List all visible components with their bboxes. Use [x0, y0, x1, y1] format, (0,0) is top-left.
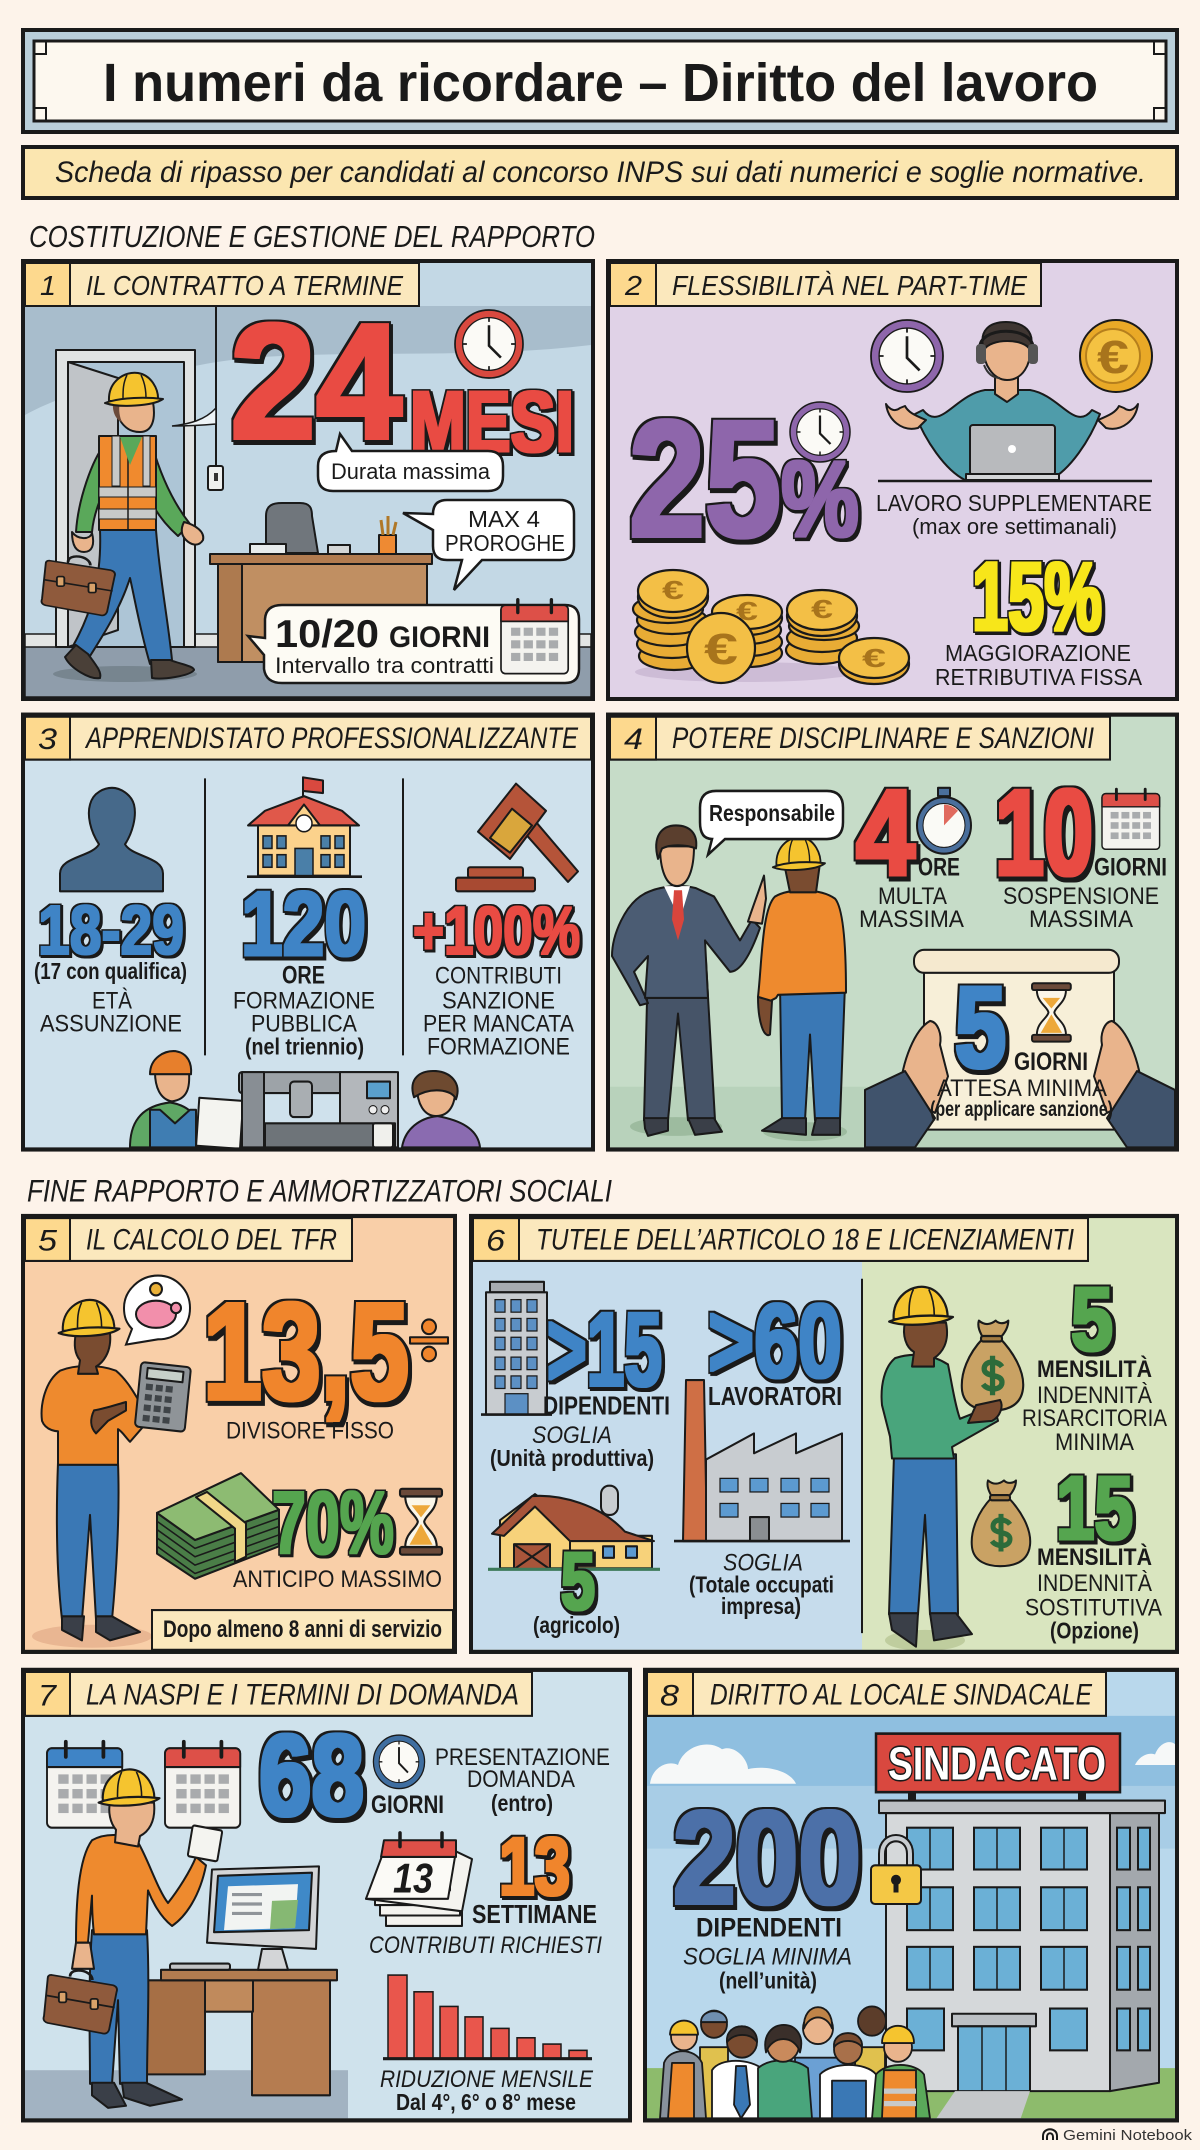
- number: 5 agricolo: [533, 1535, 620, 1638]
- column: ore: FORMAZIONE: [233, 987, 375, 1013]
- bubble: durata massima: Durata massima: [331, 459, 491, 484]
- panel tab: 6: [486, 1225, 505, 1258]
- column: contributi: CONTRIBUTI: [435, 962, 562, 988]
- number: 5 giorni: GIORNI: [1014, 1049, 1088, 1076]
- icon: purple clock: [871, 320, 943, 392]
- text: soglia totale: impresa): [721, 1594, 801, 1619]
- panel tab: 3: [38, 724, 57, 756]
- number: 25%: %: [781, 438, 859, 559]
- building: [879, 1792, 1165, 2120]
- panel tab: APPRENDISTATO PROFESSIONALIZZANTE: [84, 723, 579, 755]
- icon: coin stacks: €: [736, 596, 758, 626]
- number: 10 giorni: SOSPENSIONE: [1003, 882, 1159, 909]
- number: 25%: 25: [629, 387, 781, 572]
- bubble: durata massima: [318, 434, 503, 491]
- column: età: ETÀ: [92, 987, 132, 1013]
- text: soglia totale: (Totale occupati: [689, 1572, 834, 1597]
- number: 70%: 70%: [272, 1474, 394, 1573]
- panel tab: 8: [660, 1680, 679, 1713]
- column: contributi: +100%: [413, 894, 580, 969]
- number: 10 giorni: GIORNI: [1094, 854, 1167, 882]
- bubble: max 4 proroghe: MAX 4: [468, 506, 540, 532]
- column: età: [34, 788, 187, 1036]
- number: 5 mensilità: RISARCITORIA: [1022, 1405, 1167, 1431]
- number: 24: 24: [230, 290, 402, 473]
- icon: coin stacks: €: [662, 575, 684, 605]
- text: riduzione mensile: [380, 2065, 593, 2115]
- text: presentazione domanda: DOMANDA: [467, 1765, 575, 1792]
- wall line and switch: [208, 306, 223, 490]
- icon: red calendar: [165, 1742, 240, 1828]
- icon: coin stacks: €: [862, 643, 886, 673]
- text: maggiorazione: [935, 640, 1143, 690]
- number: 5 mensilità: MENSILITÀ: [1037, 1354, 1152, 1382]
- number: 5 giorni: (per applicare sanzione): [930, 1098, 1113, 1121]
- icon: money bag: [972, 1480, 1030, 1566]
- text: presentazione domanda: [435, 1744, 610, 1816]
- panel 2: part-time: [608, 261, 1177, 699]
- number: 200: 200: [673, 1784, 861, 1932]
- icon: division sign: [410, 1319, 448, 1361]
- number: 15 mensilità: SOSTITUTIVA: [1025, 1594, 1162, 1620]
- number: 13 settimane: [369, 1821, 602, 1958]
- number: 68 giorni: GIORNI: [371, 1792, 444, 1819]
- panel tab: [25, 717, 591, 760]
- number: 15%: 15%: [972, 542, 1102, 651]
- number: 68 giorni: 68: [259, 1711, 364, 1840]
- number: 15 mensilità: MENSILITÀ: [1037, 1543, 1152, 1570]
- number: 5 agricolo: (agricolo): [533, 1613, 620, 1638]
- panel tab: [25, 263, 419, 306]
- callout: 10/20 giorni: Intervallo tra contratti: [275, 653, 494, 678]
- number: 5 giorni: 5: [955, 963, 1006, 1091]
- panel tab: 5: [38, 1225, 57, 1258]
- text: anticipo massimo: ANTICIPO MASSIMO: [233, 1566, 442, 1592]
- title banner: I numeri da ricordare – Diritto del lavoro: [103, 53, 1098, 113]
- column: ore: PUBBLICA: [251, 1010, 357, 1036]
- number: 13,5: 13,5: [203, 1274, 409, 1429]
- text: riduzione mensile: RIDUZIONE MENSILE: [380, 2065, 593, 2092]
- subtitle strip: Scheda di ripasso per candidati al concorso INPS sui dati numerici e soglie normative.: [55, 156, 1146, 189]
- desk and computer: [130, 1866, 337, 2095]
- number: 15 mensilità: 15: [1056, 1457, 1133, 1558]
- icon: euro coin: [1080, 320, 1152, 392]
- section heading: costituzione: COSTITUZIONE E GESTIONE DEL RAPPORTO: [29, 219, 595, 254]
- apprentice, machine and tutor: [130, 1051, 480, 1149]
- panel tab: [473, 1218, 1088, 1261]
- note: dopo almeno 8 anni: Dopo almeno 8 anni di servizio: [163, 1616, 442, 1642]
- group of workers: [660, 2006, 930, 2118]
- number: >15 dipendenti: DIPENDENTI: [543, 1392, 670, 1421]
- number: 5 mensilità: MINIMA: [1055, 1429, 1134, 1455]
- callout: 10/20 giorni: GIORNI: [389, 621, 490, 654]
- icon: coin stacks: €: [704, 625, 738, 674]
- panel tab: [610, 263, 1041, 306]
- text: dipendenti soglia minima: DIPENDENTI: [696, 1912, 842, 1943]
- panel tab: FLESSIBILITÀ NEL PART-TIME: [672, 270, 1027, 301]
- worker with briefcase: [42, 373, 203, 679]
- text: maggiorazione: RETRIBUTIVA FISSA: [935, 664, 1143, 690]
- icon: calendar stack: 13: [393, 1855, 433, 1902]
- manager in suit: [612, 825, 766, 1136]
- section heading: fine rapporto: FINE RAPPORTO E AMMORTIZZATORI SOCIALI: [27, 1173, 612, 1209]
- number: 68 giorni: [259, 1711, 444, 1840]
- panel tab: [25, 1218, 352, 1261]
- panel tab: [610, 717, 1110, 760]
- panel 6: articolo 18: [471, 1216, 1177, 1652]
- panel tab: 4: [624, 724, 643, 756]
- number: >15 dipendenti: >15: [547, 1290, 662, 1408]
- bubble: responsabile: Responsabile: [709, 801, 835, 826]
- panel tab: IL CONTRATTO A TERMINE: [86, 270, 403, 301]
- panel tab: DIRITTO AL LOCALE SINDACALE: [710, 1679, 1093, 1712]
- icon: hourglass: [400, 1489, 442, 1555]
- text: soglia totale: [689, 1549, 834, 1619]
- icon: red clock: [455, 310, 523, 378]
- number: 10 giorni: [995, 766, 1167, 932]
- column: età: (17 con qualifica): [34, 959, 187, 984]
- clouds: [650, 1742, 1175, 1784]
- column: ore: [233, 777, 375, 1059]
- text: divisore fisso: DIVISORE FISSO: [226, 1417, 394, 1444]
- number: 4 ore: 4: [856, 766, 915, 901]
- number: 5 giorni: ATTESA MINIMA: [937, 1075, 1107, 1101]
- icon: calendar stack: [366, 1833, 472, 1926]
- panel tab: [647, 1672, 1106, 1716]
- bubble: max 4 proroghe: PROROGHE: [445, 530, 565, 556]
- text: dipendenti soglia minima: [683, 1912, 852, 1994]
- column: contributi: FORMAZIONE: [427, 1033, 570, 1059]
- panel tab: 2: [624, 270, 642, 301]
- sign: sindacato: SINDACATO: [888, 1738, 1106, 1790]
- panel 4: potere disciplinare: [608, 715, 1177, 1149]
- scroll with hands: [865, 950, 1175, 1147]
- worker with calculator: [32, 1300, 152, 1648]
- column: contributi: SANZIONE: [442, 987, 555, 1013]
- text: maggiorazione: MAGGIORAZIONE: [945, 640, 1131, 666]
- number: >60 lavoratori: LAVORATORI: [708, 1383, 842, 1411]
- icon: office building: [481, 1282, 552, 1415]
- subtitle strip: [23, 147, 1177, 198]
- number: 5 giorni: [930, 963, 1113, 1121]
- column: contributi: [413, 784, 580, 1059]
- text: riduzione mensile: Dal 4°, 6° o 8° mese: [396, 2089, 576, 2115]
- number: >15 dipendenti: [490, 1290, 670, 1471]
- bubble: max 4 proroghe: [403, 500, 574, 590]
- icon: piggy bank bubble: [124, 1276, 190, 1345]
- note: dopo almeno 8 anni: [152, 1610, 453, 1650]
- bubble: responsabile: [700, 791, 843, 855]
- callout: 10/20 giorni: 10/20: [275, 613, 379, 656]
- icon: barn: [488, 1486, 660, 1569]
- text: dipendenti soglia minima: SOGLIA MINIMA: [683, 1943, 852, 1970]
- icon: coin stacks: €: [811, 594, 833, 624]
- number: 13 settimane: CONTRIBUTI RICHIESTI: [369, 1932, 602, 1958]
- column: contributi: PER MANCATA: [423, 1010, 574, 1036]
- bar chart: riduzione mensile: [383, 1975, 592, 2059]
- number: >60 lavoratori: >60: [708, 1282, 842, 1399]
- number: 15 mensilità: (Opzione): [1050, 1618, 1139, 1643]
- number: 15 mensilità: [1025, 1457, 1162, 1643]
- panel 3: apprendistato: [23, 715, 593, 1149]
- icon: calculator: [135, 1362, 191, 1432]
- icon: factory: [674, 1380, 850, 1541]
- panel 8: locale sindacale: [645, 1670, 1177, 2120]
- icon: blue calendar: [47, 1742, 122, 1828]
- text: soglia totale: SOGLIA: [723, 1549, 803, 1575]
- icon: padlock: [871, 1838, 921, 1904]
- number: 13 settimane: 13: [499, 1821, 570, 1912]
- number: 4 ore: [856, 766, 971, 932]
- number: 15 mensilità: INDENNITÀ: [1037, 1570, 1152, 1596]
- text: lavoro supplementare: (max ore settimanali): [912, 514, 1117, 539]
- number: 13 settimane: SETTIMANE: [472, 1900, 597, 1929]
- text: presentazione domanda: (entro): [491, 1791, 553, 1816]
- column: età: ASSUNZIONE: [40, 1010, 182, 1036]
- speech tail near worker: [172, 408, 216, 426]
- number: 4 ore: ORE: [918, 854, 960, 882]
- label: MESI: MESI: [410, 375, 574, 470]
- worker with money bag: [882, 1287, 1023, 1651]
- icon: small clock: [790, 402, 850, 462]
- panel tab: 7: [38, 1680, 57, 1713]
- panel 5: tfr: [23, 1216, 455, 1652]
- worker in orange: [758, 837, 847, 1141]
- number: 5 mensilità: INDENNITÀ: [1037, 1382, 1152, 1408]
- number: 10 giorni: MASSIMA: [1029, 905, 1133, 932]
- number: 5 mensilità: 5: [1071, 1268, 1113, 1369]
- panel tab: POTERE DISCIPLINARE E SANZIONI: [672, 723, 1094, 755]
- number: >15 dipendenti: (Unità produttiva): [490, 1445, 654, 1471]
- number: 5 mensilità: [1022, 1268, 1167, 1455]
- person with headset and laptop: [878, 322, 1152, 481]
- number: >15 dipendenti: SOGLIA: [532, 1421, 612, 1448]
- text: lavoro supplementare: [876, 490, 1152, 539]
- worker with briefcase: [44, 1769, 222, 2108]
- text: lavoro supplementare: LAVORO SUPPLEMENTARE: [876, 490, 1152, 516]
- column: ore: ORE: [282, 962, 325, 989]
- text: dipendenti soglia minima: (nell’unità): [719, 1968, 817, 1994]
- panel tab: [25, 1672, 532, 1716]
- number: 4 ore: MASSIMA: [859, 905, 964, 932]
- column: ore: 120: [241, 872, 366, 974]
- title banner: [23, 30, 1177, 132]
- panel tab: 1: [40, 270, 56, 301]
- text: presentazione domanda: PRESENTAZIONE: [435, 1744, 610, 1770]
- number: 10 giorni: 10: [995, 766, 1093, 901]
- column: ore: (nel triennio): [245, 1034, 364, 1059]
- icon: euro coin: €: [1097, 331, 1129, 383]
- panel tab: LA NASPI E I TERMINI DI DOMANDA: [86, 1679, 519, 1712]
- number: 5 agricolo: 5: [561, 1535, 595, 1626]
- door: [56, 350, 195, 647]
- panel tab: IL CALCOLO DEL TFR: [86, 1224, 337, 1257]
- callout: 10/20 giorni: [248, 600, 579, 683]
- panel tab: TUTELE DELL’ARTICOLO 18 E LICENZIAMENTI: [536, 1224, 1074, 1257]
- number: 4 ore: MULTA: [878, 882, 947, 909]
- panel 7: naspi: [23, 1670, 630, 2120]
- column: età: 18-29: [38, 891, 184, 969]
- desk: [210, 503, 432, 662]
- icon: coin stacks: [633, 570, 909, 684]
- footer: gemini notebook: Gemini Notebook: [1063, 2127, 1193, 2144]
- icon: money stack: [157, 1473, 279, 1579]
- panel 1: contratto a termine: [23, 261, 593, 699]
